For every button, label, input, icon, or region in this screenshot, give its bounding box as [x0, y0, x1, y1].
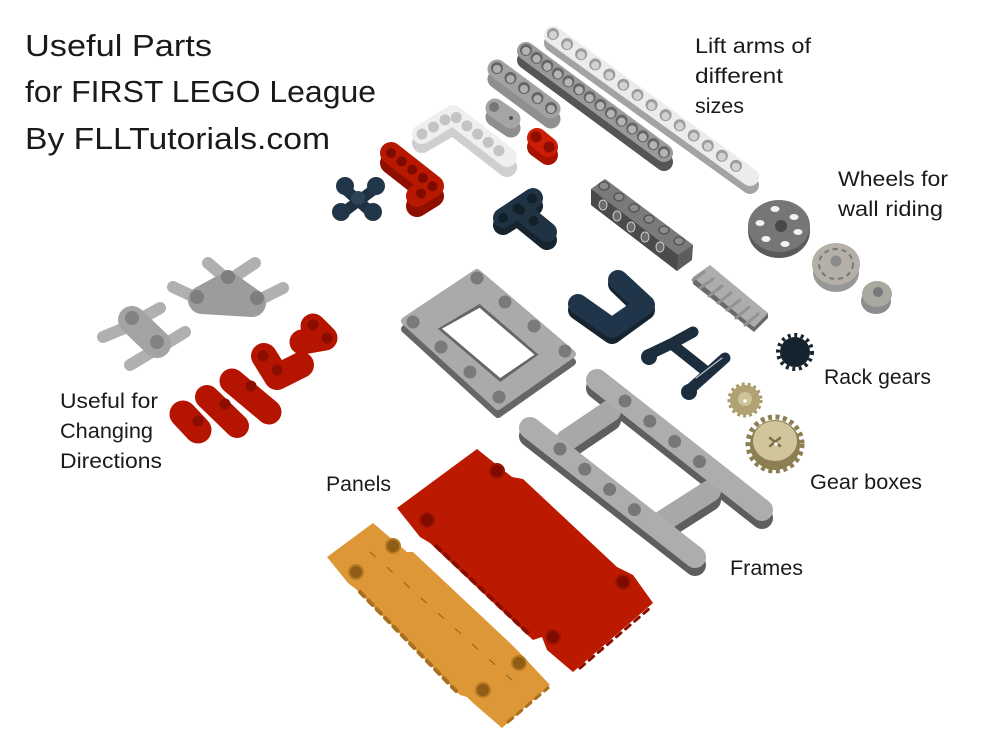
lift arm: medium gray [497, 68, 551, 119]
label: lift arms [695, 35, 811, 118]
connector: small gray [103, 308, 185, 365]
label: changing directions: Useful for [60, 390, 158, 413]
label: lift arms: sizes [695, 95, 744, 118]
wheel: small [861, 281, 892, 314]
title [25, 28, 376, 156]
label: wheels [837, 168, 948, 221]
rack gear [693, 265, 768, 332]
lift arm: white L [422, 115, 507, 167]
gear: small tan [729, 384, 761, 416]
label: wheels: wall riding [837, 198, 943, 221]
lift arm: long light [553, 34, 750, 185]
label: panels: Panels [326, 473, 391, 496]
lift arm: red L [391, 153, 433, 206]
gear: black [778, 335, 812, 369]
label: wheels: Wheels for [838, 168, 948, 191]
wheel: large [748, 200, 810, 258]
gear: large tan [748, 417, 802, 471]
lift arm: dark T [503, 198, 547, 240]
label: changing directions: Changing [60, 420, 153, 443]
frame: open with cross bars [530, 380, 762, 565]
panel: red [397, 449, 653, 672]
connectors: red direction changers [183, 320, 332, 430]
label: lift arms: different [695, 65, 783, 88]
label: gear boxes: Gear boxes [810, 471, 922, 494]
lift arm: small red [530, 132, 554, 155]
frame: closed [405, 272, 572, 414]
panel: orange [327, 523, 550, 728]
label: rack gears: Rack gears [824, 366, 931, 389]
wheel: medium [812, 243, 860, 292]
technic brick [591, 179, 693, 271]
label: frames: Frames [730, 557, 803, 580]
lift arm: short gray [489, 102, 513, 128]
label: lift arms: Lift arms of [695, 35, 811, 58]
label: changing directions [60, 390, 162, 473]
connector: dark H [641, 332, 725, 400]
title: for FIRST LEGO League [25, 74, 376, 109]
connector: dark cross [332, 177, 385, 221]
connector: dark U [578, 280, 645, 334]
connector: large gray [173, 263, 283, 305]
lift arm: long dark [526, 50, 664, 162]
title: Useful Parts [25, 28, 212, 63]
title: By FLLTutorials.com [25, 121, 330, 156]
label: changing directions: Directions [60, 450, 162, 473]
